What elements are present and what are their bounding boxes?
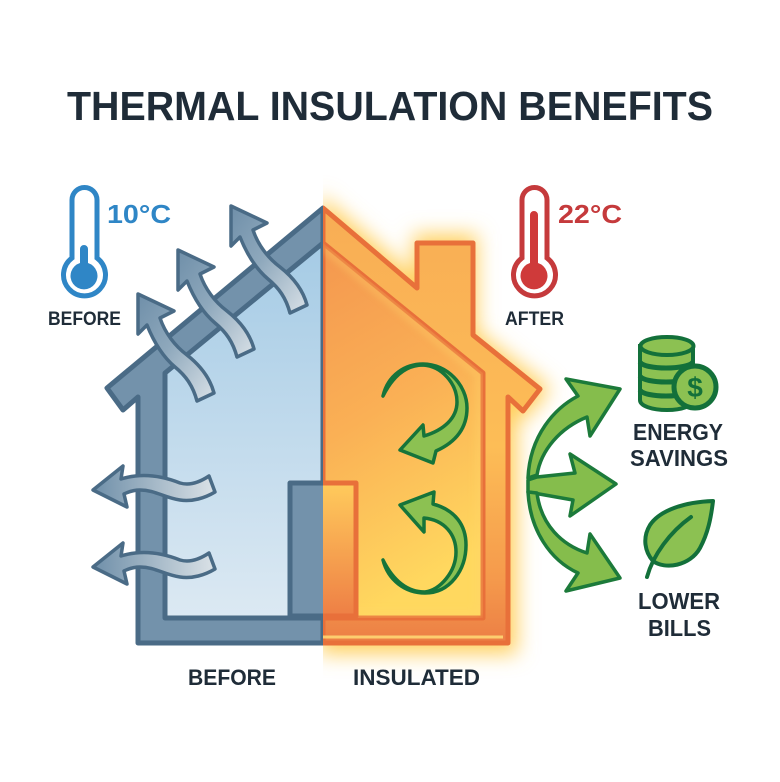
circulation arrow: lower <box>383 492 466 593</box>
temperature: 10°C: 10°C <box>107 199 171 229</box>
thermometer: after <box>514 188 556 296</box>
arrow: down to lower bills <box>528 492 620 591</box>
door: insulated <box>323 480 358 618</box>
heat-loss arrow: roof 1 <box>138 294 214 401</box>
door: uninsulated <box>288 480 323 616</box>
label: lower bills <box>638 588 720 641</box>
icon: coins <box>640 337 716 410</box>
insulated interior <box>323 243 483 618</box>
label: before house: BEFORE <box>188 665 276 690</box>
house: uninsulated half <box>104 206 323 646</box>
icon: leaf <box>645 501 713 577</box>
benefit arrows <box>528 379 620 591</box>
label: energy savings: SAVINGS <box>630 445 728 471</box>
label: energy savings <box>630 419 728 471</box>
insulated shell <box>323 208 540 643</box>
label: lower bills: LOWER <box>638 588 720 614</box>
thermometer: before <box>63 188 105 296</box>
label: after thermometer: AFTER <box>505 309 564 330</box>
label: lower bills: BILLS <box>648 615 711 641</box>
arrow: up to energy savings <box>528 379 620 478</box>
arrow: straight <box>528 454 616 516</box>
label: insulated house: INSULATED <box>353 665 480 690</box>
label: energy savings: ENERGY <box>633 419 723 445</box>
icon: dollar sign: $ <box>687 372 703 403</box>
heat-loss arrow: wall upper <box>93 466 215 507</box>
heat-loss arrow: roof 3 <box>231 206 307 313</box>
interior inner glow <box>323 247 479 614</box>
house: insulated half <box>290 203 545 650</box>
circulation arrow: upper <box>383 364 467 463</box>
title: THERMAL INSULATION BENEFITS <box>67 83 713 129</box>
heat-loss arrow: roof 2 <box>178 250 254 357</box>
label: before thermometer: BEFORE <box>48 309 121 330</box>
heat glow <box>323 203 545 650</box>
temperature: 22°C: 22°C <box>558 199 622 229</box>
heat-loss arrow: wall lower <box>93 543 215 584</box>
